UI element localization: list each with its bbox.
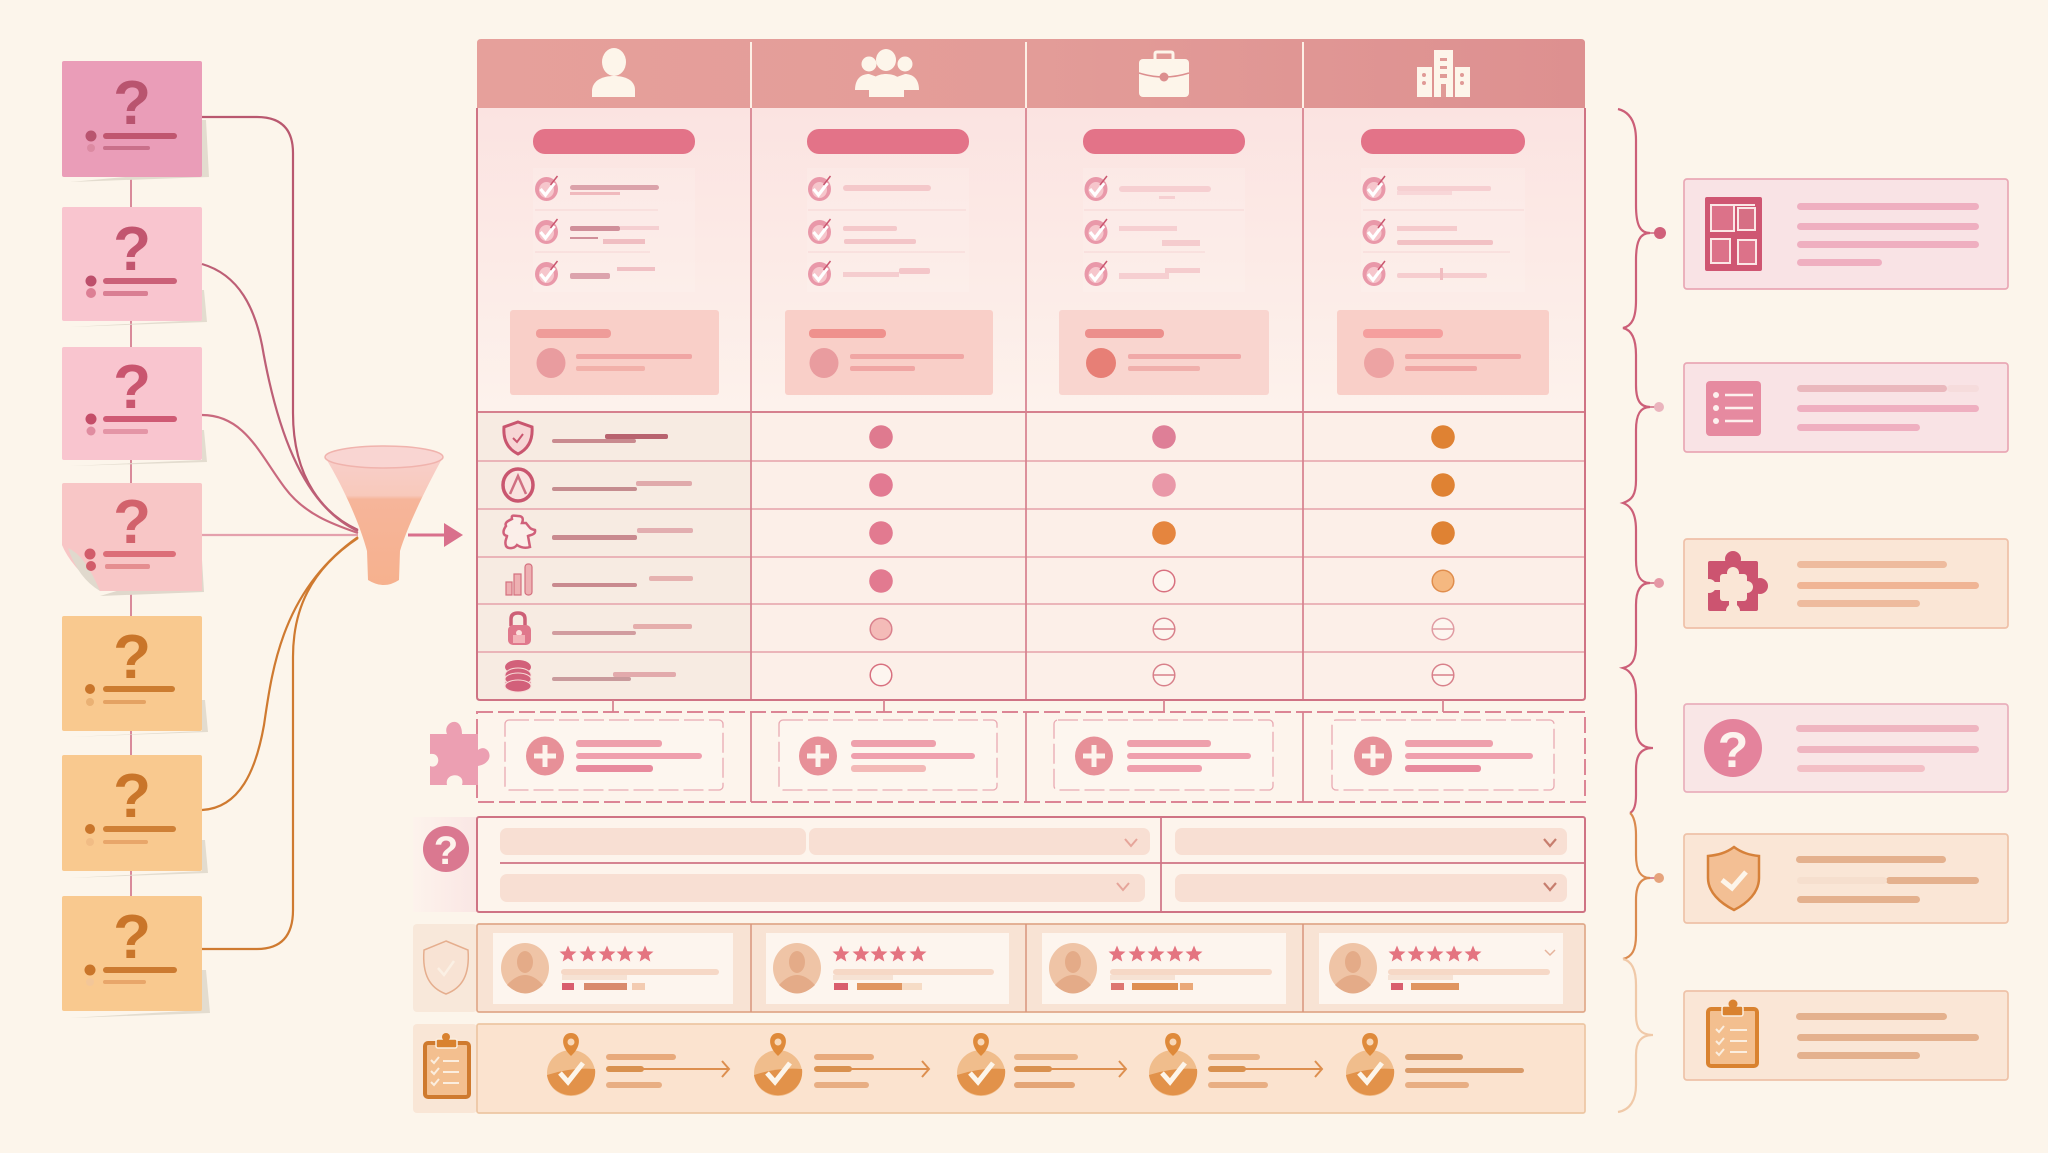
panel: assurance [1684,834,2008,923]
plan column 2 [785,129,993,395]
icon: puzzle [1702,551,1768,618]
panel: layout template [1684,179,2008,289]
note 7: ? [113,903,151,972]
row icon: database [505,660,531,692]
panel: list [1684,363,2008,452]
note 2 [62,207,207,327]
icon: list [1706,381,1761,436]
brace dots [1654,227,1666,883]
panel: checklist [1684,991,2008,1080]
testimonial row [413,924,1585,1012]
matrix background [750,412,1585,700]
icon: layout [1705,197,1762,271]
row icon: shield [504,422,532,454]
note 4 with curled corner: ? [113,488,151,557]
step 3 [957,1033,1126,1096]
add-on icon: puzzle [430,722,490,785]
row icon: puzzle [504,516,535,548]
add-on card 2 [779,720,997,790]
connectors into funnel [202,117,358,949]
row icon: speed gauge [503,469,533,501]
note 2: ? [113,215,151,284]
icon: person [592,48,635,97]
icon: faded shield [424,941,468,994]
step 2 [754,1033,929,1096]
add-on card 1 [505,720,723,790]
icon: question circle: ? [434,829,458,873]
row icon: bars [506,564,532,595]
icon: briefcase [1139,52,1189,97]
feature dots column 4 [1431,425,1455,686]
question notes column [62,61,210,1018]
timeline row [413,1024,1585,1113]
note 1 [62,61,209,182]
vertical links between question notes [130,177,132,896]
curly brace connector [1618,109,1660,1112]
header band [477,39,1585,108]
dropdown fields [500,828,1567,902]
icon: clipboard [1708,1000,1757,1066]
funnel [325,446,443,585]
plan column 3 [1059,129,1269,395]
row icons and labels [503,422,693,692]
note 7 [62,896,210,1018]
column body background [477,108,1585,412]
icon: clipboard [425,1033,469,1097]
add-on row [430,700,1585,802]
icon: question circle [423,826,469,873]
note 5 [62,616,208,737]
plan column 4 [1337,129,1549,395]
step 5 [1346,1033,1524,1096]
panel: questions [1684,704,2008,792]
plan column 1 [510,129,719,395]
feature dots column 3 [1152,425,1176,686]
row icon: padlock [508,613,531,645]
step 4 [1149,1033,1322,1096]
testimonial card 2 [766,933,1009,1004]
table grid lines [477,108,1585,700]
comparison table [477,39,1585,700]
testimonial card 4 [1319,933,1563,1004]
add-on card 3 [1054,720,1273,790]
note 6: ? [113,762,151,831]
icon: shield [1708,847,1759,910]
step 1 [547,1033,729,1096]
icon: group [855,49,919,97]
testimonial card 3 [1042,933,1286,1004]
note 5: ? [113,623,151,692]
note 1: ? [113,69,151,138]
note 3 [62,347,207,466]
icon: buildings [1417,50,1470,97]
note 3: ? [113,353,151,422]
add-on card 4 [1332,720,1554,790]
FAQ row [413,817,1585,912]
icon: question [1704,719,1762,778]
feature dots column 2 [869,425,893,686]
testimonial card 1 [493,933,733,1004]
arrow from funnel to table [408,523,463,547]
panel: puzzle [1684,539,2008,628]
note 6 [62,755,208,878]
icon: question: ? [1718,722,1748,778]
note 4 with curled corner [62,483,204,596]
